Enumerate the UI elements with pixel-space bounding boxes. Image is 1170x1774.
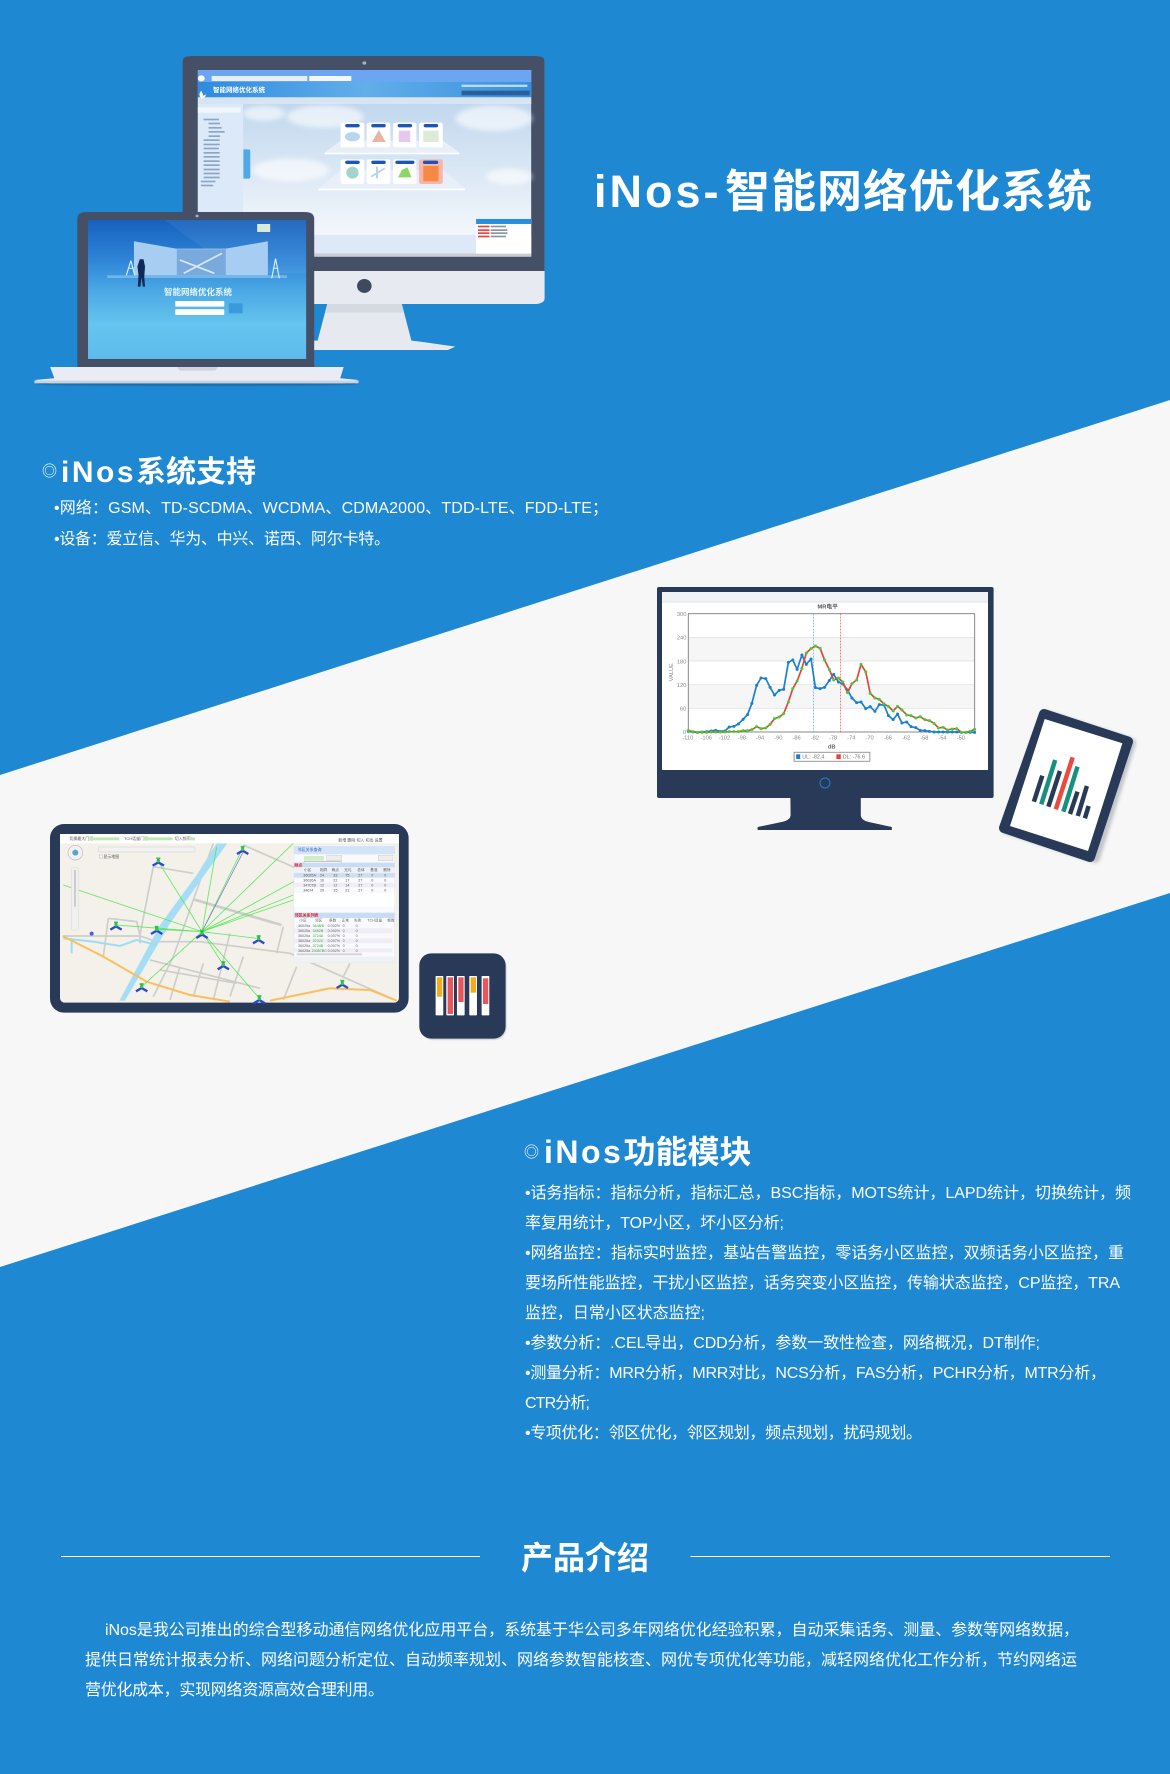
- chart legend: DL: -76.6: [843, 755, 865, 761]
- module list: [525, 1184, 1131, 1442]
- data panel: 0: [356, 939, 358, 943]
- data panel: 0: [384, 883, 386, 887]
- axis labels: 0: [683, 730, 686, 736]
- data panel: 频数: [387, 918, 395, 923]
- map nav control: [68, 845, 83, 930]
- axis labels: -110: [682, 735, 693, 741]
- laptop lid: [77, 212, 314, 367]
- axis labels: -94: [756, 735, 764, 741]
- data panel: 邻区关系列表: [295, 912, 319, 918]
- sector markers: [90, 846, 348, 1003]
- data panel: 0: [356, 944, 358, 948]
- axis labels: 180: [677, 659, 686, 665]
- heading icon: ◎: [42, 463, 57, 480]
- data panel: 0.007%: [328, 934, 341, 938]
- chart legend: [794, 752, 870, 761]
- heading: 功能模块: [624, 1134, 752, 1170]
- heading: 产品介绍: [521, 1540, 649, 1576]
- data panel: 14: [345, 883, 349, 887]
- data panel: 36025a: [298, 924, 311, 928]
- data panel: 失败: [354, 918, 362, 923]
- module list: CTR分析;: [525, 1394, 590, 1412]
- axis labels: -54: [938, 735, 947, 741]
- data panel: 0: [371, 888, 373, 892]
- data panel: 0: [384, 888, 386, 892]
- data panel: 删除: [383, 867, 391, 872]
- intro paragraph: [85, 1620, 1079, 1699]
- data panel: 0: [371, 873, 373, 877]
- data panel: TCH话量: [367, 918, 382, 923]
- data panel: 24: [320, 873, 324, 877]
- illustration: chart monitor: [657, 587, 994, 830]
- data panel: 无礼: [344, 867, 352, 872]
- notice box: [476, 219, 531, 254]
- towers: [126, 259, 279, 278]
- power button: [820, 778, 830, 788]
- data panel: 邻区: [315, 918, 323, 923]
- heading: iNos: [61, 456, 136, 489]
- top status bar: 新增 删除 切入 切出 设置: [338, 836, 383, 842]
- data panel: 小区: [299, 918, 307, 923]
- data panel: 27: [358, 873, 362, 877]
- axis labels: 120: [677, 683, 686, 689]
- top status bar: 切换最大门限: [69, 835, 93, 841]
- river: [119, 843, 227, 1001]
- data panel: 0: [384, 873, 386, 877]
- map toolbar: 显示地图: [103, 853, 119, 859]
- data panel: 0.002%: [328, 929, 341, 933]
- data panel: 17: [345, 878, 349, 882]
- axis labels: [669, 612, 965, 741]
- right rule: [690, 1556, 1110, 1557]
- top status bar: TCH话量门限: [124, 835, 148, 841]
- laptop login title: 智能网络优化系统: [164, 287, 233, 297]
- shelves: [318, 141, 465, 190]
- axis labels: -58: [920, 735, 928, 741]
- data panel: 正常: [342, 918, 349, 923]
- data panel: 0: [384, 878, 386, 882]
- UL series: [688, 655, 975, 732]
- data panel: 3648/D: [313, 924, 325, 928]
- data panel: 0.007%: [328, 944, 341, 948]
- laptop base: [34, 367, 359, 383]
- tablet bars: [1034, 757, 1089, 818]
- data panel: [294, 845, 395, 963]
- data panel: 0: [371, 878, 373, 882]
- roads: [63, 843, 397, 1001]
- axis labels: 240: [677, 636, 686, 642]
- map screen: [60, 834, 399, 1003]
- highway: [63, 936, 397, 1002]
- data panel: 36025a: [298, 934, 311, 938]
- data panel: 0: [356, 934, 358, 938]
- data panel: 3724B: [313, 944, 324, 948]
- data panel: 0.007%: [328, 939, 341, 943]
- data panel: 两点: [332, 867, 339, 872]
- main title: iNos-: [594, 166, 722, 217]
- data panel: 0: [343, 939, 345, 943]
- heading icon: ◎: [524, 1144, 539, 1161]
- illustration: chart tablet: [1004, 714, 1131, 858]
- data panel: 3702C: [313, 939, 324, 943]
- data panel: 23357BC: [312, 949, 327, 953]
- data panel: 36026A: [303, 878, 316, 882]
- axis labels: -106: [701, 735, 712, 741]
- data panel: 相同: [320, 867, 328, 872]
- DL series: [688, 646, 975, 732]
- axis labels: -90: [774, 735, 782, 741]
- data panel: 75: [345, 873, 349, 877]
- data panel: 12: [320, 883, 324, 887]
- data panel: 34674: [303, 888, 313, 892]
- monitor stand: [183, 56, 545, 350]
- module list: •参数分析：.CEL导出，CDD分析，参数一致性检查，网络概况，DT制作;: [525, 1333, 1040, 1352]
- axis labels: -86: [792, 735, 801, 741]
- data panel: 频点: [294, 861, 302, 867]
- data panel: 0: [356, 949, 358, 953]
- map toolbar: [98, 847, 195, 859]
- line chart: MR电平: [817, 603, 838, 611]
- axis labels: -98: [738, 735, 746, 741]
- data panel: 27: [358, 883, 362, 887]
- data panel: 21: [345, 888, 349, 892]
- data panel: 3452B: [313, 929, 324, 933]
- data panel: 36025A: [303, 873, 316, 877]
- axis labels: -70: [865, 735, 874, 741]
- data panel: 27: [358, 878, 362, 882]
- axis labels: VALUE: [669, 663, 675, 681]
- illustration: desktop monitor: [183, 56, 545, 350]
- illustration: laptop: [34, 212, 360, 386]
- data panel: 3724A: [313, 934, 324, 938]
- data panel: 邻区关系查询: [298, 846, 322, 852]
- data panel: 0: [343, 944, 345, 948]
- support list: [54, 498, 608, 548]
- data panel: 15: [333, 888, 337, 892]
- line chart: dB: [828, 744, 836, 750]
- section: product introduction: [61, 1540, 1110, 1699]
- intro paragraph: 营优化成本，实现网络资源高效合理利用。: [85, 1680, 384, 1699]
- sidebar: [198, 104, 250, 217]
- support list: •设备：爱立信、华为、中兴、诺西、阿尔卡特。: [54, 530, 390, 548]
- person: [137, 259, 145, 287]
- data panel: 33: [333, 873, 337, 877]
- browser bar: [198, 70, 531, 82]
- laptop screen: [88, 220, 306, 359]
- axis labels: -102: [719, 735, 730, 741]
- data panel: 36025a: [298, 939, 311, 943]
- data panel: 27: [358, 888, 362, 892]
- left rule: [61, 1556, 480, 1557]
- data panel: 0: [356, 929, 358, 933]
- data panel: 22: [333, 878, 337, 882]
- data panel: 0.002%: [328, 924, 341, 928]
- data panel: 0: [343, 934, 345, 938]
- intro paragraph: 提供日常统计报表分析、网络问题分析定位、自动频率规划、网络参数智能核查、网优专项优化等功能，减轻网络优化工作分析，节约网络运: [85, 1650, 1077, 1669]
- clouds: [243, 105, 532, 185]
- module tiles: [341, 123, 443, 184]
- axis labels: -50: [957, 735, 965, 741]
- app title: 智能网络优化系统: [213, 85, 266, 94]
- axis labels: 300: [677, 612, 686, 618]
- data panel: 16: [320, 878, 324, 882]
- chart legend: UL: -82.4: [802, 755, 824, 761]
- data panel: 12: [333, 883, 337, 887]
- diagonal light band: [0, 400, 1170, 1267]
- module list: •专项优化：邻区优化，邻区规划，频点规划，扰码规划。: [525, 1424, 922, 1442]
- axis labels: -62: [902, 735, 910, 741]
- module list: •测量分析：MRR分析，MRR对比，NCS分析，FAS分析，PCHR分析，MTR分析，: [525, 1364, 1106, 1382]
- data panel: 条数: [329, 918, 337, 923]
- heading: 系统支持: [136, 456, 256, 489]
- data panel: 0: [343, 924, 345, 928]
- icon: tablet with colour columns: [419, 953, 507, 1040]
- top status bar: [60, 834, 399, 843]
- data panel: 36025a: [298, 929, 311, 933]
- axis labels: -74: [847, 735, 855, 741]
- data panel: 20: [320, 888, 324, 892]
- line chart: [669, 603, 975, 761]
- laptop shadow: [34, 382, 360, 386]
- main title: 智能网络优化系统: [725, 166, 1093, 217]
- axis labels: -82: [811, 735, 819, 741]
- data panel: 0.002%: [328, 949, 341, 953]
- axis labels: -66: [884, 735, 892, 741]
- data panel: 0: [343, 929, 345, 933]
- data panel: 0: [343, 949, 345, 953]
- data panel: 0: [371, 883, 373, 887]
- data panel: 小区: [304, 867, 312, 872]
- data panel: 34707B: [303, 883, 316, 887]
- axis labels: -78: [829, 735, 837, 741]
- axis labels: 60: [680, 707, 686, 713]
- heading: iNos: [544, 1134, 623, 1170]
- illustration: map tablet: [50, 824, 409, 1013]
- neighbour links: [63, 843, 297, 998]
- data panel: 基准: [370, 867, 378, 872]
- module list: 率复用统计，TOP小区，坏小区分析;: [525, 1214, 784, 1232]
- support list: •网络：GSM、TD-SCDMA、WCDMA、CDMA2000、TDD-LTE、FDD-LTE；: [54, 498, 608, 517]
- module list: •话务指标：指标分析，指标汇总，BSC指标，MOTS统计，LAPD统计，切换统计，频: [525, 1184, 1131, 1202]
- data panel: 0: [356, 924, 358, 928]
- module list: 要场所性能监控，干扰小区监控，话务突变小区监控，传输状态监控，CP监控，TRA: [525, 1274, 1120, 1292]
- section: iNos system support: [42, 456, 608, 548]
- top status bar: 切入频率: [175, 835, 191, 841]
- data panel: 36025a: [298, 949, 311, 953]
- data panel: 36025a: [298, 944, 311, 948]
- intro paragraph: iNos是我公司推出的综合型移动通信网络优化应用平台，系统基于华公司多年网络优化经验积累，自动采集话务、测量、参数等网络数据，: [105, 1620, 1079, 1639]
- module list: 监控，日常小区状态监控;: [525, 1304, 705, 1322]
- data panel: 总体: [357, 867, 365, 872]
- app header: [198, 82, 531, 97]
- section: iNos function modules: [524, 1134, 1131, 1442]
- module list: •网络监控：指标实时监控，基站告警监控，零话务小区监控，双频话务小区监控，重: [525, 1243, 1124, 1262]
- monitor stand: [758, 798, 892, 830]
